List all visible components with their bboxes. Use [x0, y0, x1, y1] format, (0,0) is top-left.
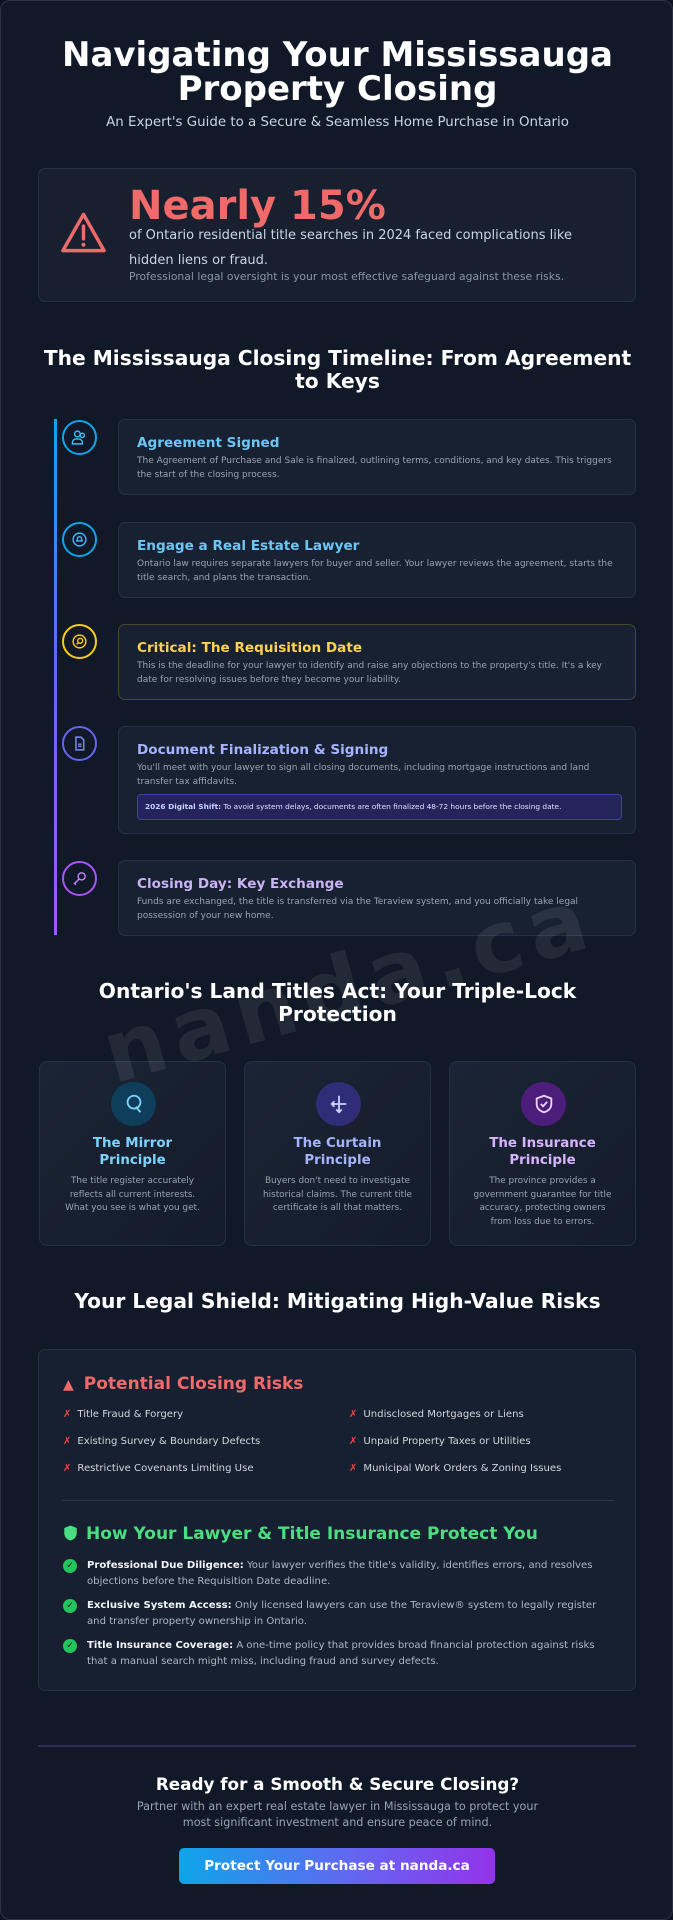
stat card	[38, 168, 636, 302]
card	[118, 522, 636, 598]
timeline line	[54, 419, 57, 935]
cta heading: Ready for a Smooth & Secure Closing?	[156, 1774, 519, 1794]
risk list: ✗ Restrictive Covenants Limiting Use	[63, 1463, 254, 1474]
panel: mirror principle: The Mirror	[93, 1136, 172, 1151]
step 3	[62, 624, 636, 700]
heading: how your lawyer protects you: How Your Lawyer & Title Insurance Protect You	[86, 1524, 538, 1544]
panel: insurance principle: The Insurance	[489, 1136, 596, 1151]
risk list	[63, 1409, 561, 1474]
card: Agreement Signed	[137, 435, 280, 451]
stat number: Nearly 15%	[129, 183, 386, 229]
callout: 2026 digital shift: 2026 Digital Shift: To avoid system delays, documents are often finalized 48-72 hours before the closing date.	[145, 802, 561, 811]
card: Critical: The Requisition Date	[137, 640, 362, 656]
title: Navigating Your Mississauga	[62, 35, 613, 75]
card	[118, 419, 636, 495]
risk list: ✗ Undisclosed Mortgages or Liens	[349, 1409, 524, 1420]
protection list: ✓	[66, 1561, 74, 1571]
card: Funds are exchanged, the title is transferred via the Teraview system, and you officially take legal possession of your new home.	[137, 897, 578, 920]
card: Closing Day: Key Exchange	[137, 876, 344, 892]
panel: risks and protections	[38, 1349, 636, 1691]
step 1	[62, 419, 636, 495]
step 2	[62, 522, 636, 598]
risk list: ✗ Municipal Work Orders & Zoning Issues	[349, 1463, 561, 1474]
card: Engage a Real Estate Lawyer	[137, 538, 359, 554]
protection list: Professional Due Diligence: Your lawyer verifies the title's validity, identifies errors, and resolves objections before the Requisition Date deadline.	[87, 1560, 592, 1587]
risk list: ✗ Existing Survey & Boundary Defects	[63, 1436, 260, 1447]
icon: mirror	[111, 1082, 156, 1126]
card	[118, 860, 636, 936]
panel: insurance principle: Principle	[509, 1153, 576, 1168]
heading: potential closing risks: ▲ Potential Closing Risks	[63, 1374, 303, 1394]
card	[118, 624, 636, 700]
panel: insurance principle: The province provides a government guarantee for title accuracy, protecting owners from loss due to errors.	[474, 1176, 611, 1226]
cta text: most significant investment and ensure peace of mind.	[183, 1816, 492, 1829]
cta button	[179, 1848, 495, 1884]
panel: mirror principle: The title register accurately reflects all current interests. What you see is what you get.	[65, 1176, 200, 1213]
title: Property Closing	[178, 69, 497, 109]
heading: timeline: The Mississauga Closing Timeline: From Agreement	[44, 346, 631, 370]
risk list: ✗ Title Fraud & Forgery	[63, 1409, 183, 1420]
stat note: Professional legal oversight is your most effective safeguard against these risks.	[129, 270, 564, 283]
callout: 2026 digital shift	[137, 794, 622, 820]
card: The Agreement of Purchase and Sale is finalized, outlining terms, conditions, and key dates. This triggers the start of the closing process.	[137, 456, 612, 480]
icon: lawyer	[62, 522, 97, 557]
panel: curtain principle	[244, 1061, 431, 1246]
protection list: ✓	[66, 1641, 74, 1651]
protection list: Exclusive System Access: Only licensed lawyers can use the Teraview® system to legally register and transfer property ownership in Ontario.	[87, 1600, 596, 1627]
panel: insurance principle	[449, 1061, 636, 1246]
card	[118, 726, 636, 834]
card: Document Finalization & Signing	[137, 742, 388, 758]
panel: curtain principle: Buyers don't need to investigate historical claims. The current title certificate is all that matters.	[263, 1176, 412, 1213]
icon: shield	[521, 1082, 566, 1126]
panel: curtain principle: The Curtain	[294, 1136, 381, 1151]
subtitle: An Expert's Guide to a Secure & Seamless Home Purchase in Ontario	[106, 115, 569, 130]
step 4	[62, 726, 636, 834]
panel: mirror principle	[39, 1061, 226, 1246]
cta text: Partner with an expert real estate lawyer in Mississauga to protect your	[137, 1800, 538, 1813]
icon: document	[62, 726, 97, 761]
heading: land titles act	[99, 979, 576, 1026]
risk list: ✗ Unpaid Property Taxes or Utilities	[349, 1436, 531, 1447]
panel: curtain principle: Principle	[304, 1153, 371, 1168]
card: Ontario law requires separate lawyers for buyer and seller. Your lawyer reviews the agreement, starts the title search, and plans the transaction.	[137, 559, 613, 582]
icon: key	[62, 861, 97, 896]
icon: search	[62, 624, 97, 659]
heading: timeline	[44, 346, 631, 393]
protection list: Title Insurance Coverage: A one-time policy that provides broad financial protection against risks that a manual search might miss, including fraud and survey defects.	[87, 1640, 595, 1667]
protection list: ✓	[66, 1601, 74, 1611]
card: You'll meet with your lawyer to sign all closing documents, including mortgage instructions and land transfer tax affidavits.	[137, 763, 589, 786]
heading: timeline: to Keys	[295, 369, 380, 393]
panel: mirror principle: Principle	[99, 1153, 166, 1168]
heading: legal shield: Your Legal Shield: Mitigating High-Value Risks	[74, 1289, 601, 1313]
cta button: Protect Your Purchase at nanda.ca	[204, 1858, 470, 1874]
icon: curtain	[316, 1082, 361, 1126]
cta text	[137, 1800, 538, 1829]
step 5	[62, 860, 636, 936]
watermark: nanda.ca	[92, 868, 606, 1104]
title	[62, 35, 613, 109]
protection list	[63, 1559, 596, 1667]
icon: people	[62, 420, 97, 455]
heading: land titles act: Ontario's Land Titles Act: Your Triple-Lock	[99, 979, 576, 1003]
stat text: of Ontario residential title searches in 2024 faced complications like hidden liens or fraud.	[129, 228, 572, 268]
card: This is the deadline for your lawyer to identify and raise any objections to the property's title. It's a key date for resolving issues before they become your liability.	[137, 661, 602, 684]
icon: warning	[61, 212, 106, 252]
heading: land titles act: Protection	[278, 1002, 397, 1026]
